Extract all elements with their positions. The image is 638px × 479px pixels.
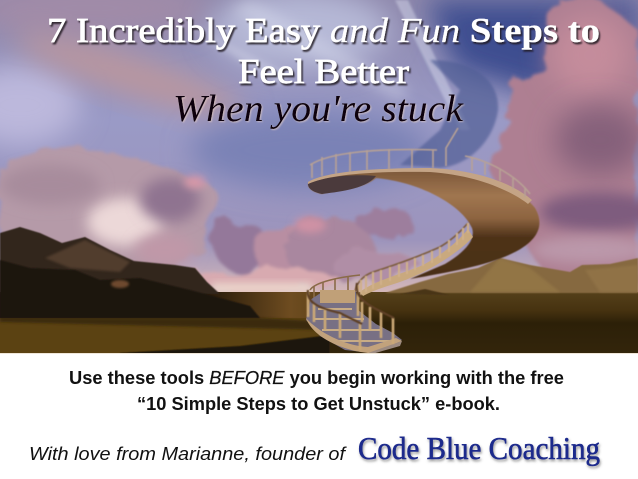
attribution: With love from Marianne, founder of xyxy=(29,443,347,464)
ground xyxy=(0,292,638,354)
left mountains xyxy=(0,227,260,318)
lower back railing xyxy=(309,274,360,298)
right mountains xyxy=(385,258,638,295)
sky xyxy=(0,0,638,300)
title line 2: Feel Better xyxy=(238,52,409,91)
instruction line 2: “10 Simple Steps to Get Unstuck” e-book. xyxy=(137,393,500,414)
title line 1: 7 Incredibly Easy and Fun Steps to xyxy=(47,11,600,50)
top platform deck xyxy=(308,168,532,204)
bright base line xyxy=(0,353,638,354)
title xyxy=(47,11,600,91)
brand name: Code Blue Coaching: Code Blue Coaching xyxy=(358,430,600,466)
subtitle: when you're stuck: When you're stuck xyxy=(173,88,464,130)
background photo: sky and staircase landscape xyxy=(0,0,638,354)
spiral staircase xyxy=(306,128,539,354)
middle railing xyxy=(355,223,468,295)
sun rays xyxy=(206,0,466,128)
clouds left and centre xyxy=(0,148,420,293)
stair steps xyxy=(306,292,402,353)
front railings xyxy=(308,283,394,350)
instruction line 1: Use these tools BEFORE you begin working with the free xyxy=(69,367,564,388)
faded upper spiral xyxy=(400,60,498,168)
top railing xyxy=(310,128,530,197)
pink clouds upper right xyxy=(488,0,638,285)
instruction text xyxy=(69,367,564,414)
staircase band underside xyxy=(308,170,539,279)
middle deck xyxy=(360,229,473,296)
